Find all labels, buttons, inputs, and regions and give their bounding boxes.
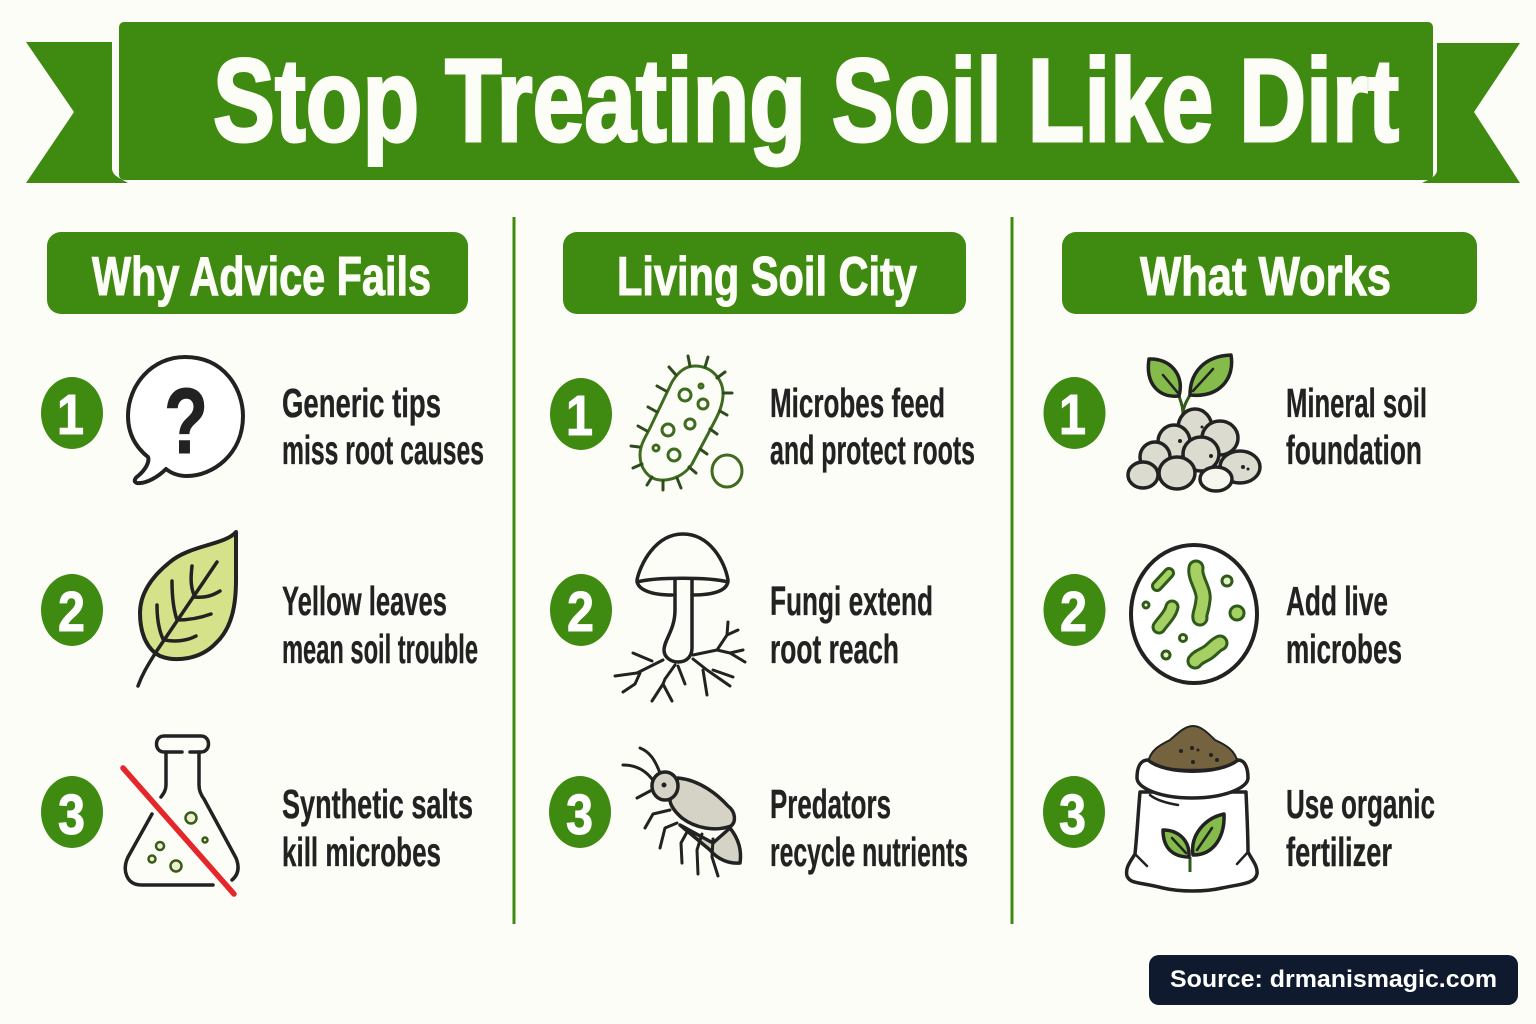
title banner <box>26 22 1520 183</box>
text: yellow leaves mean soil trouble <box>282 578 478 672</box>
number badge 3 <box>41 776 103 848</box>
text: generic tips miss root causes <box>282 380 484 473</box>
number badge 1: 1 <box>1059 383 1086 447</box>
text: microbes feed and protect roots <box>770 380 975 473</box>
text: mineral soil foundation: foundation <box>1286 427 1422 473</box>
text: synthetic salts kill microbes: Synthetic salts <box>282 781 473 827</box>
number badge 2 <box>550 574 612 646</box>
item: live microbes <box>1044 545 1402 683</box>
number badge 2: 2 <box>1060 580 1087 644</box>
icon: petri dish with microbes <box>1131 545 1257 683</box>
text: use organic fertilizer: Use organic <box>1286 781 1435 827</box>
item: synthetic salts <box>41 736 473 894</box>
icon: soil insect <box>623 748 741 876</box>
text: add live microbes: Add live <box>1286 578 1388 624</box>
text: mineral soil foundation: Mineral soil <box>1286 380 1427 426</box>
number badge 2 <box>1044 574 1106 646</box>
icon: crossed-out flask <box>123 736 238 894</box>
icon: speech bubble with question mark <box>128 357 243 483</box>
panel: why advice fails <box>41 232 484 894</box>
text: mineral soil foundation <box>1286 380 1427 473</box>
text: add live microbes: microbes <box>1286 626 1402 672</box>
text: fungi extend root reach: root reach <box>770 626 899 672</box>
text: predators recycle nutrients: recycle nutrients <box>770 829 968 875</box>
heading: living soil city: Living Soil City <box>617 245 917 307</box>
banner right tail <box>1422 43 1520 183</box>
icon: mushroom with roots <box>615 534 745 701</box>
text: microbes feed and protect roots: and protect roots <box>770 427 975 473</box>
number badge 3 <box>1043 776 1105 848</box>
icon: yellow leaf <box>138 532 236 686</box>
panel: living soil city <box>549 232 975 876</box>
number badge 1 <box>550 378 612 450</box>
item: mineral soil <box>1044 355 1427 491</box>
text: fungi extend root reach <box>770 578 933 672</box>
banner left tail <box>26 42 128 183</box>
number badge 1 <box>1044 377 1106 449</box>
number badge 3: 3 <box>1059 783 1086 847</box>
text: use organic fertilizer: fertilizer <box>1286 829 1392 875</box>
number badge 1 <box>41 377 103 449</box>
heading: living soil city <box>563 232 966 314</box>
item: fungi <box>550 534 933 701</box>
text: microbes feed and protect roots: Microbes feed <box>770 380 945 426</box>
number badge 2 <box>41 574 103 646</box>
number badge 2: 2 <box>567 580 594 644</box>
number badge 3: 3 <box>58 783 85 847</box>
panel: what works <box>1043 232 1477 891</box>
text: yellow leaves mean soil trouble: Yellow leaves <box>282 578 447 624</box>
text: add live microbes <box>1286 578 1402 672</box>
source badge <box>1149 955 1518 1005</box>
text: use organic fertilizer <box>1286 781 1435 875</box>
icon: bacterium <box>631 356 742 490</box>
source badge: Source: drmanismagic.com <box>1170 966 1497 993</box>
number badge 2: 2 <box>58 580 85 644</box>
text: yellow leaves mean soil trouble: mean soil trouble <box>282 626 478 672</box>
item: yellow leaves <box>41 532 478 686</box>
number badge 1: 1 <box>566 384 593 448</box>
heading: what works <box>1062 232 1477 314</box>
heading: why advice fails <box>47 232 468 314</box>
text: generic tips miss root causes: miss root causes <box>282 427 484 473</box>
number badge 3: 3 <box>566 783 593 847</box>
text: synthetic salts kill microbes <box>282 781 473 875</box>
banner main ribbon <box>119 22 1433 180</box>
icon: speech bubble with question mark: ? <box>164 369 208 473</box>
number badge 3 <box>549 776 611 848</box>
heading: what works: What Works <box>1140 245 1391 307</box>
item: predators <box>549 748 968 876</box>
icon: fertilizer bag <box>1127 726 1257 891</box>
icon: seedling on stones <box>1128 355 1260 491</box>
text: generic tips miss root causes: Generic tips <box>282 380 441 426</box>
text: predators recycle nutrients: Predators <box>770 781 891 827</box>
heading: why advice fails: Why Advice Fails <box>92 245 431 307</box>
text: synthetic salts kill microbes: kill microbes <box>282 829 441 875</box>
text: predators recycle nutrients <box>770 781 968 875</box>
item: organic fertilizer <box>1043 726 1435 891</box>
number badge 1: 1 <box>57 383 84 447</box>
item: microbes <box>550 356 975 490</box>
text: fungi extend root reach: Fungi extend <box>770 578 933 624</box>
item: generic tips <box>41 357 484 483</box>
